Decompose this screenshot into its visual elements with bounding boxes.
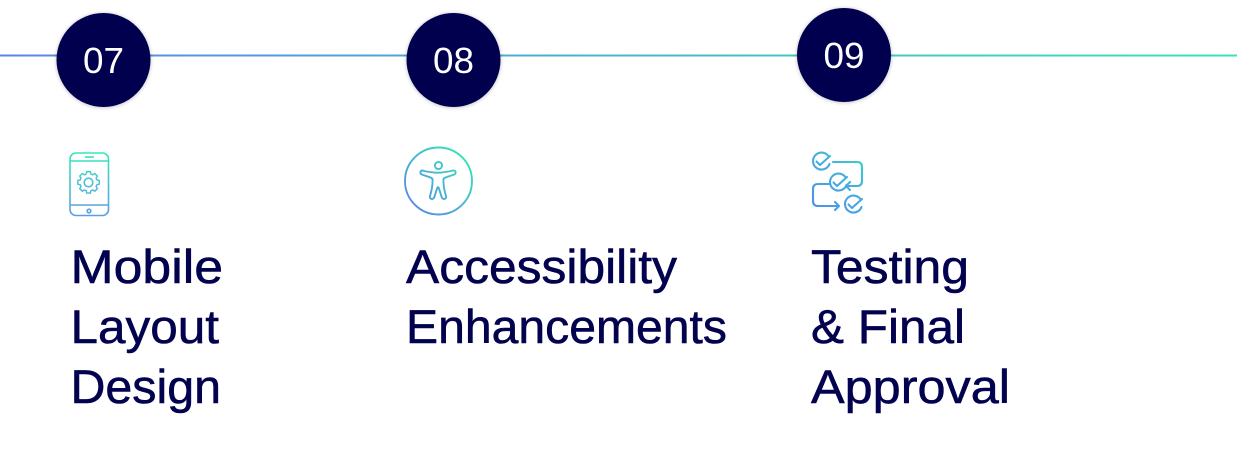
timeline line bbox=[0, 54, 1237, 56]
step 08 marker bbox=[406, 12, 502, 108]
step 09 marker: 09 bbox=[824, 35, 864, 76]
heading: Mobile Layout Design: Design bbox=[70, 360, 221, 413]
heading: Testing & Final Approval bbox=[811, 240, 1010, 413]
step 07 marker bbox=[56, 12, 152, 108]
step 09 marker bbox=[796, 8, 892, 104]
heading: Mobile Layout Design bbox=[70, 240, 223, 413]
icon: mobile phone with gear bbox=[70, 153, 108, 216]
heading: Testing & Final Approval: Approval bbox=[811, 360, 1010, 413]
heading: Accessibility Enhancements: Enhancements bbox=[406, 300, 727, 353]
heading: Mobile Layout Design: Layout bbox=[70, 300, 219, 353]
step 08 marker: 08 bbox=[433, 40, 474, 81]
heading: Testing & Final Approval: & Final bbox=[811, 300, 965, 353]
heading: Mobile Layout Design: Mobile bbox=[70, 240, 223, 293]
heading: Accessibility Enhancements: Accessibility bbox=[406, 240, 678, 293]
step 07 marker: 07 bbox=[83, 40, 124, 81]
heading: Accessibility Enhancements bbox=[406, 240, 727, 353]
icon: testing workflow checks bbox=[813, 153, 862, 213]
heading: Testing & Final Approval: Testing bbox=[811, 240, 969, 293]
icon: accessibility figure bbox=[405, 148, 472, 214]
